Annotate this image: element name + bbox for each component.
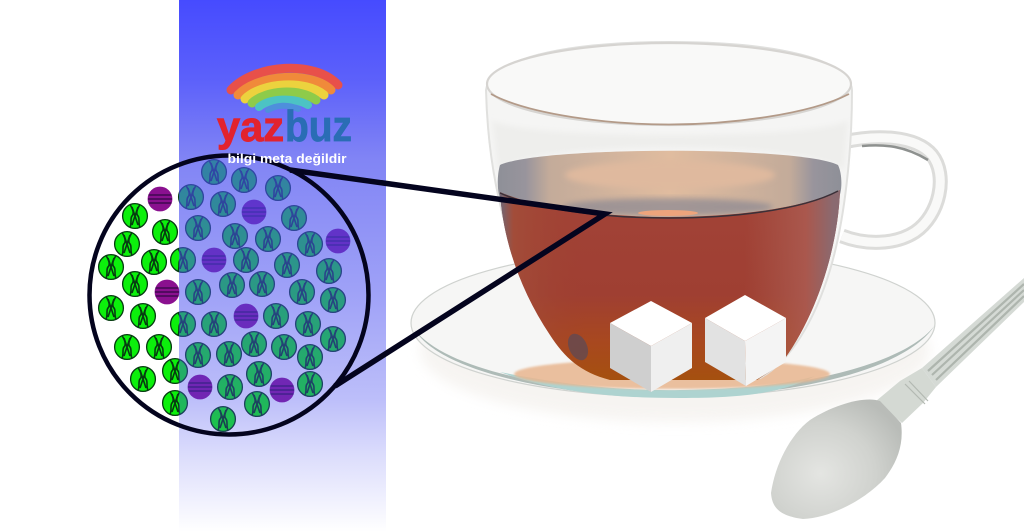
- purple sugar molecules: [148, 187, 350, 402]
- green water molecules: [99, 160, 345, 431]
- spoon: [771, 278, 1024, 519]
- logo: yazbuz: buz: [285, 102, 352, 151]
- blue gradient band: [179, 0, 386, 532]
- cup handle: [842, 138, 940, 242]
- logo wordmark: yaz: [217, 103, 284, 150]
- saucer: [411, 249, 935, 422]
- sugar cube left: [610, 301, 692, 392]
- logo: yazbuz: [217, 68, 352, 166]
- logo tagline: bilgi meta değildir: [228, 152, 347, 166]
- glass cup body: [486, 42, 852, 378]
- magnifier outline and connector lines: [90, 156, 605, 434]
- logo rainbow: [231, 68, 338, 110]
- cup rim opening: [487, 43, 851, 125]
- sugar cube right: [705, 295, 786, 386]
- tea in the cup: [498, 151, 841, 380]
- magnified molecules: [99, 160, 350, 431]
